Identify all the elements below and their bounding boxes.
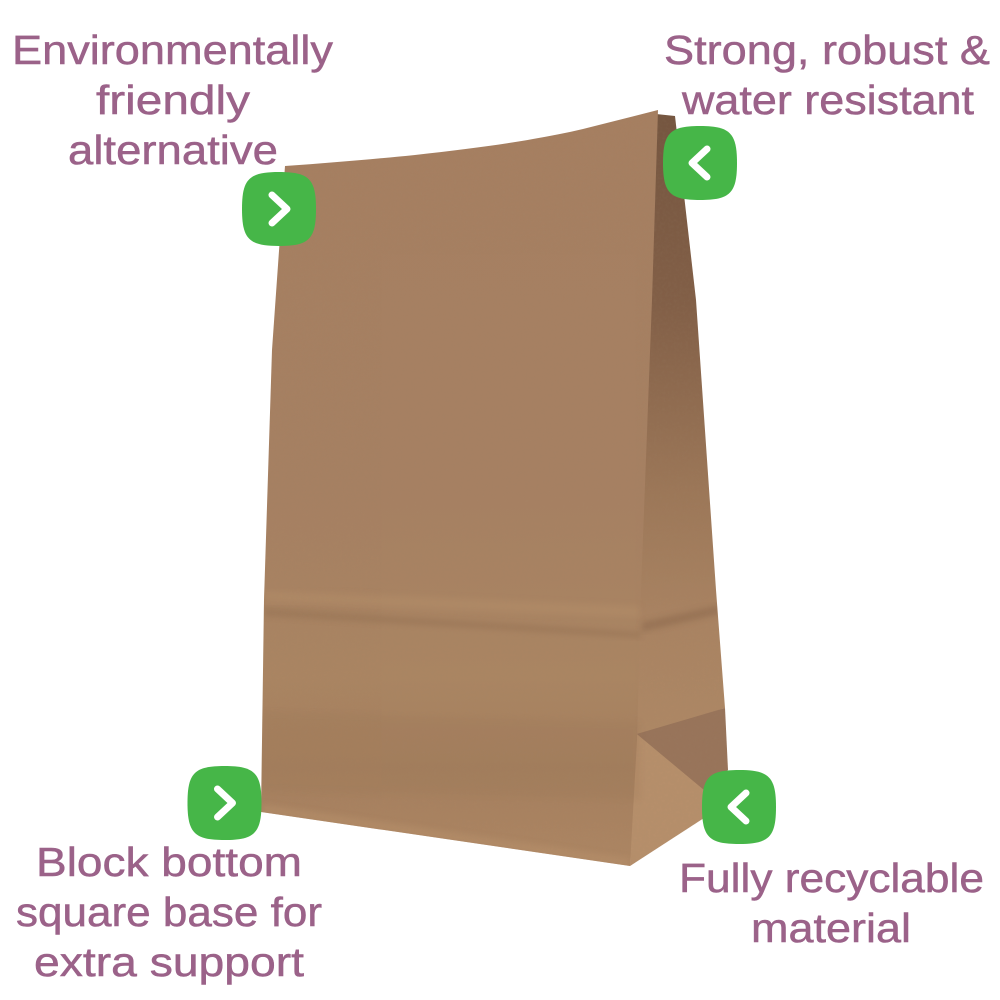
- callout: block bottom square base: square base for: [16, 889, 322, 935]
- callout: environmentally friendly alternative: alternative: [68, 127, 278, 173]
- icon: green badge right chevron bottom left: [188, 766, 262, 840]
- bag crease and shading: [262, 592, 718, 866]
- callout: fully recyclable material: Fully recyclable: [679, 855, 984, 901]
- callout: strong, robust and water resistant: water resistant: [681, 77, 975, 123]
- callout: environmentally friendly alternative: Environmentally: [12, 27, 334, 73]
- callout: environmentally friendly alternative: [12, 27, 334, 173]
- callout: fully recyclable material: material: [751, 905, 911, 951]
- paper bag illustration: [255, 105, 735, 875]
- callout: fully recyclable material: [679, 855, 984, 951]
- icon: green badge right chevron top left: [242, 172, 316, 246]
- callout: strong, robust and water resistant: Strong, robust &: [664, 27, 990, 73]
- bag gusset bottom triangle: [630, 730, 704, 866]
- callout: environmentally friendly alternative: friendly: [96, 77, 251, 123]
- bag front panel: [261, 110, 658, 866]
- callout: block bottom square base: [16, 839, 322, 985]
- icon: green badge left chevron bottom right: [702, 770, 776, 844]
- callout: block bottom square base: extra support: [34, 939, 305, 985]
- callout: strong, robust and water resistant: [664, 27, 990, 123]
- icon: green badge left chevron top right: [663, 126, 737, 200]
- bag gusset lower dark fold: [630, 708, 728, 792]
- callout: block bottom square base: Block bottom: [36, 839, 302, 885]
- bag side gusset: [630, 114, 725, 740]
